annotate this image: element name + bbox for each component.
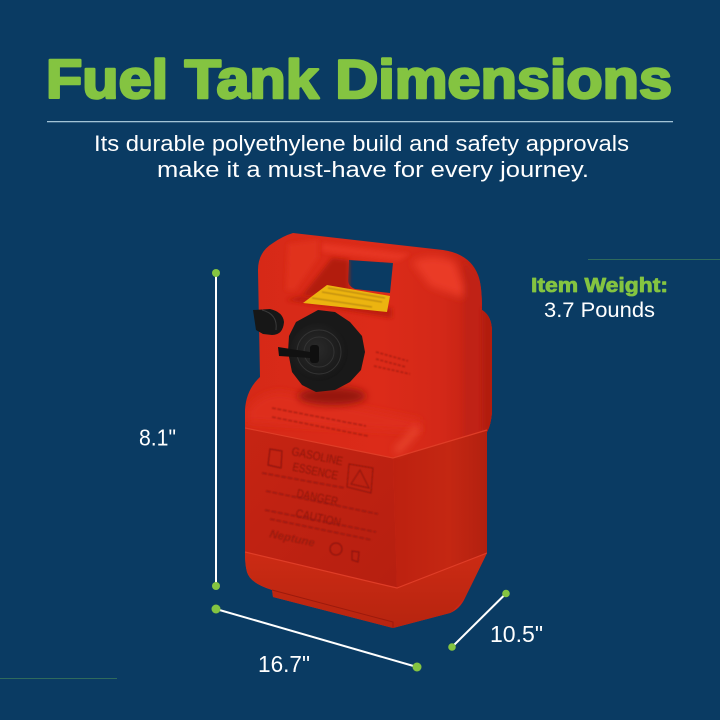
- seam lines: [245, 428, 487, 458]
- base band: [243, 552, 487, 630]
- background accent lines: [0, 260, 720, 678]
- upper shoulder highlight: [248, 392, 420, 432]
- title: Fuel Tank Dimensions: [46, 48, 672, 110]
- warning label: [303, 285, 390, 312]
- lower front panel: [243, 428, 397, 588]
- cap shadow: [298, 387, 366, 405]
- fuel tank illustration: [243, 233, 500, 630]
- subtitle: Its durable polyethylene build and safety approvals: [94, 131, 629, 156]
- pillar highlight: [412, 257, 463, 298]
- embossed lettering: CAUTION: [294, 506, 342, 529]
- depth dimension marker: [448, 590, 510, 651]
- item weight callout: 3.7 Pounds: [544, 299, 655, 322]
- item weight callout: [531, 274, 668, 322]
- item weight callout: Item Weight:: [531, 274, 668, 297]
- embossed lettering: [262, 444, 378, 562]
- handle recess shading: [302, 258, 352, 296]
- ledge below label: [286, 296, 392, 318]
- depth label: 10.5": [490, 621, 543, 647]
- width label: 16.7": [258, 651, 310, 677]
- embossed lettering: ESSENCE: [291, 460, 339, 483]
- fuel cap: [278, 310, 365, 392]
- vent screw: [253, 309, 284, 335]
- lower right side panel: [393, 430, 487, 588]
- right edge shading: [478, 274, 492, 432]
- handle bar highlight: [322, 243, 410, 261]
- height label: 8.1": [139, 424, 176, 450]
- warning triangle box: [347, 464, 373, 493]
- height dimension marker: [212, 269, 220, 590]
- title divider: [47, 121, 673, 123]
- width dimension marker: [212, 604, 422, 672]
- embossed lettering: DANGER: [295, 486, 340, 509]
- tank body: [245, 233, 492, 628]
- embossed lettering: GASOLINE: [290, 444, 344, 468]
- subtitle: [94, 131, 629, 182]
- embossed lettering: Neptune: [268, 528, 316, 549]
- left grip highlight: [288, 244, 315, 287]
- subtitle: make it a must-have for every journey.: [157, 157, 589, 182]
